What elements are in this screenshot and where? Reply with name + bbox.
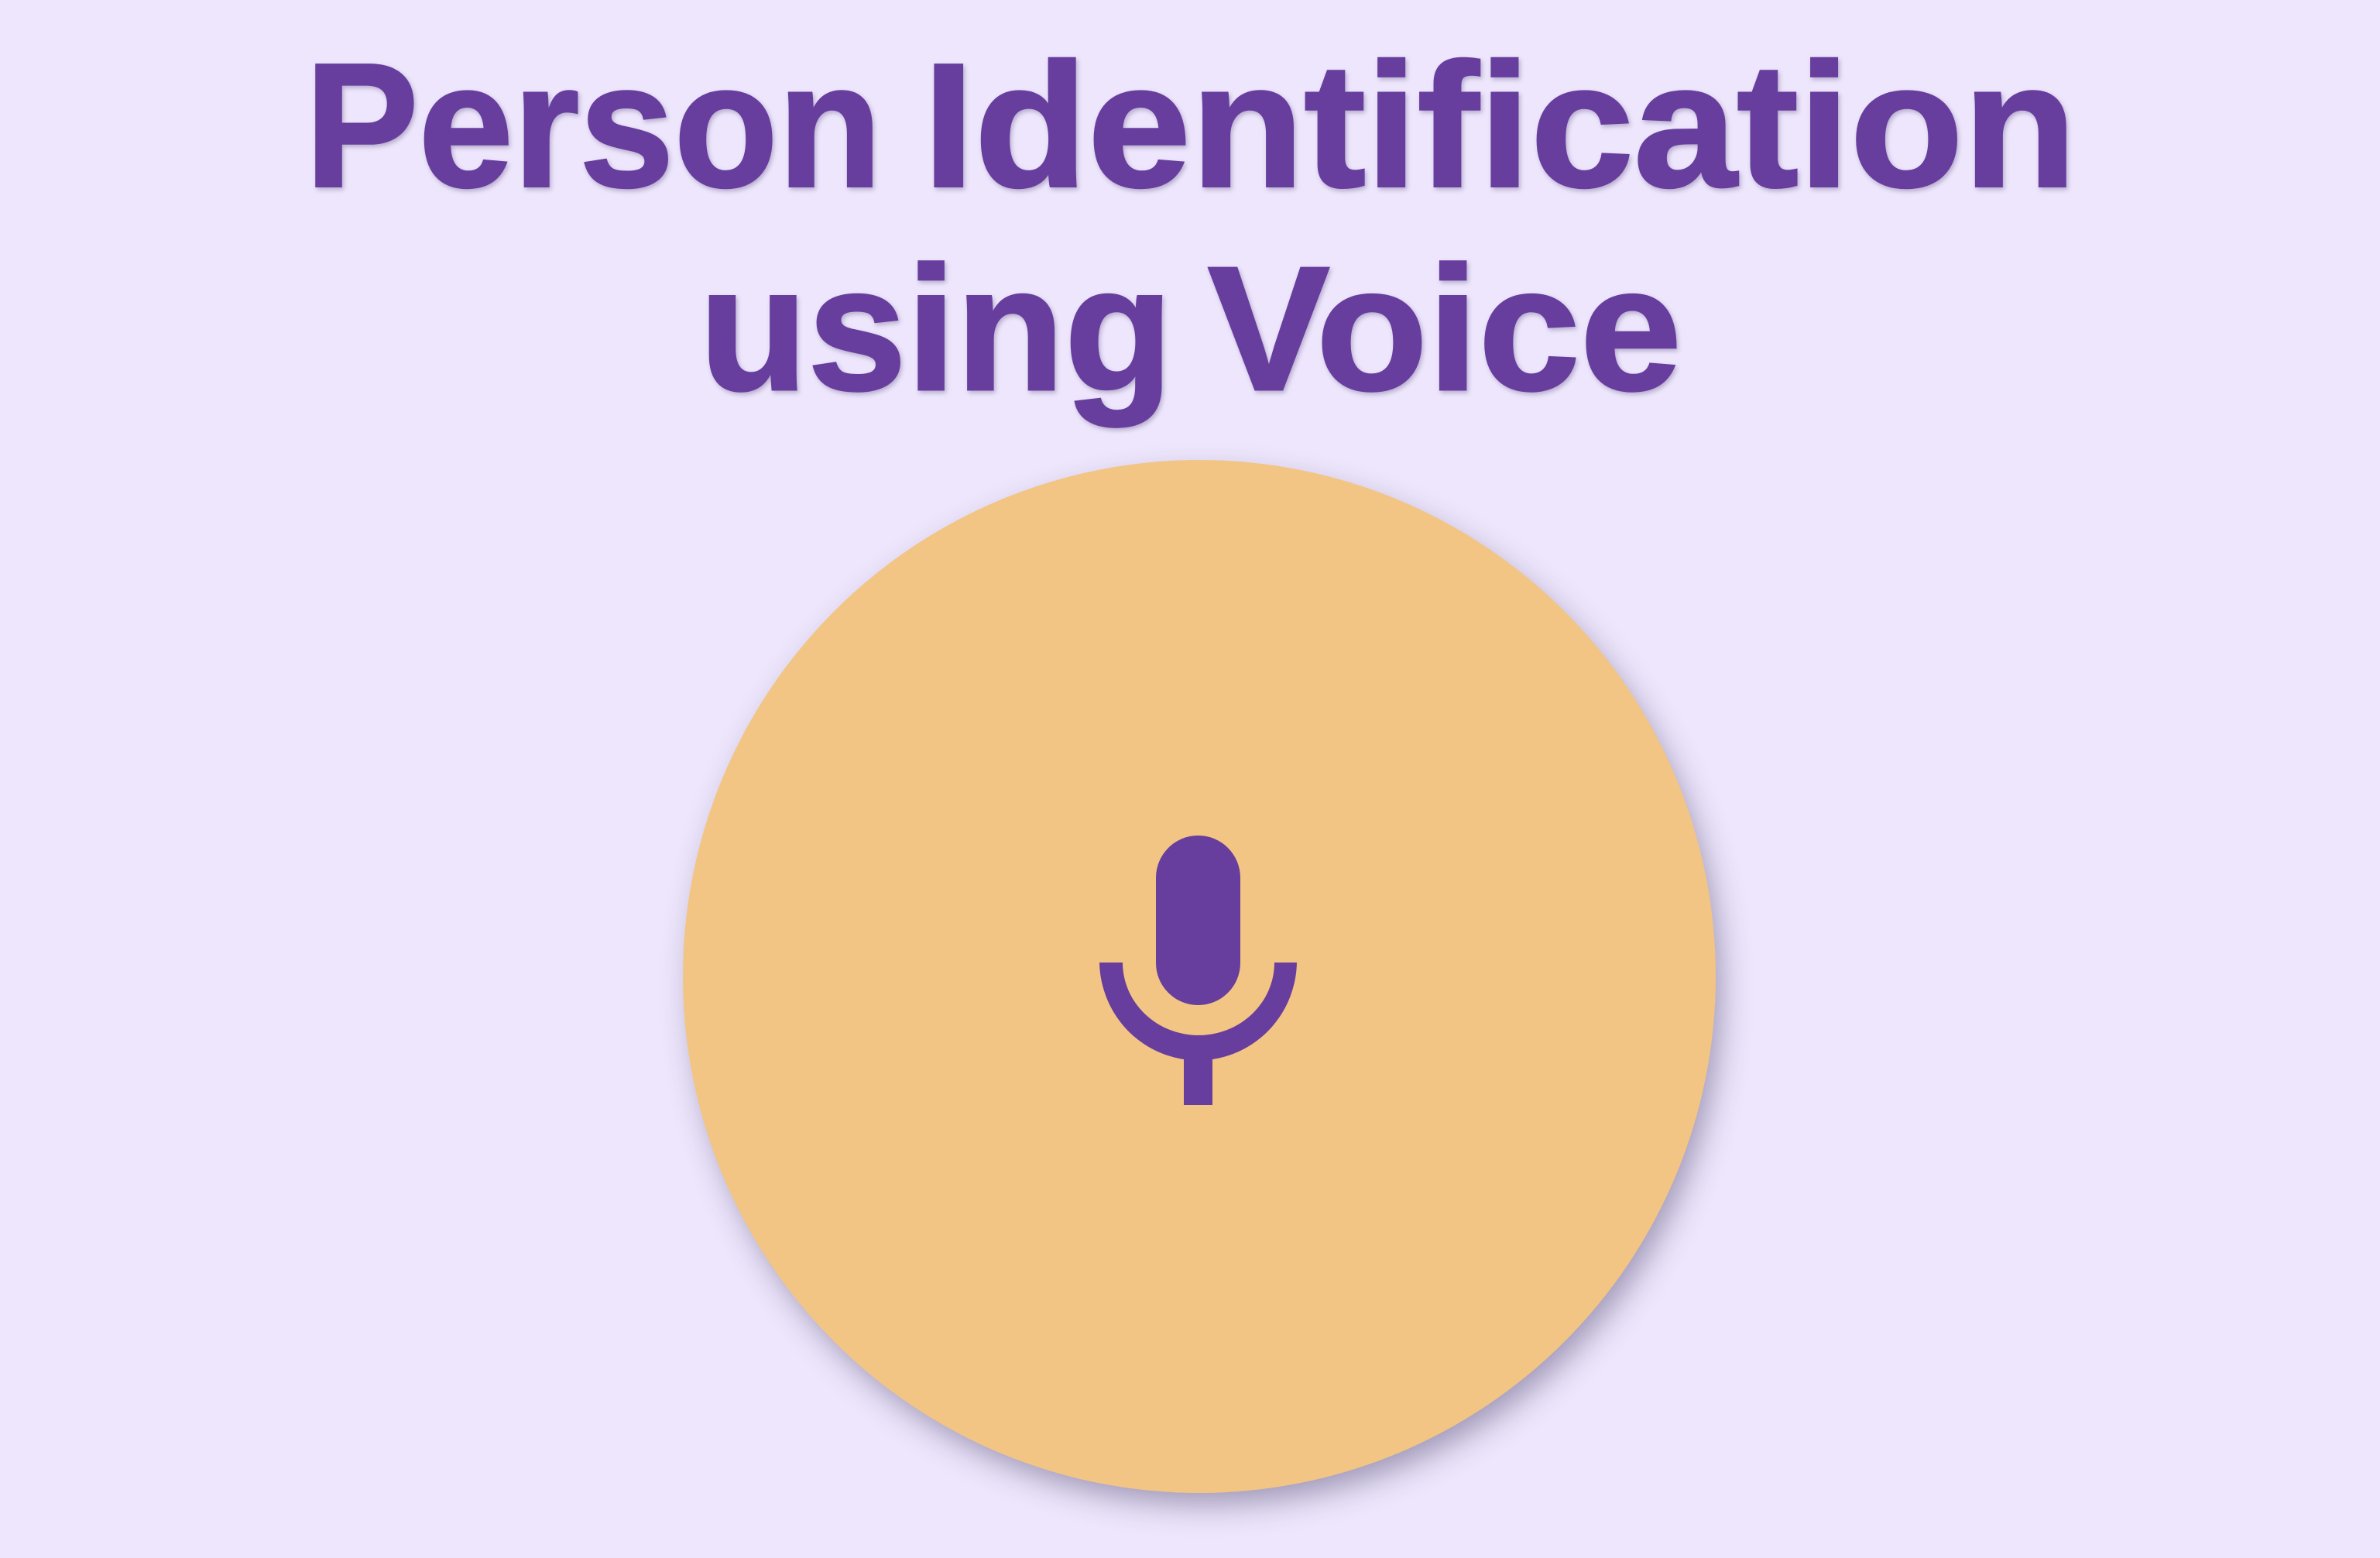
title xyxy=(305,28,2076,427)
title: Person xyxy=(305,28,882,225)
icon: microphone xyxy=(1099,836,1297,1105)
title: using xyxy=(699,231,1173,427)
title: Voice xyxy=(1208,231,1682,427)
orange circle xyxy=(683,460,1716,1493)
title: Identification xyxy=(923,28,2076,225)
